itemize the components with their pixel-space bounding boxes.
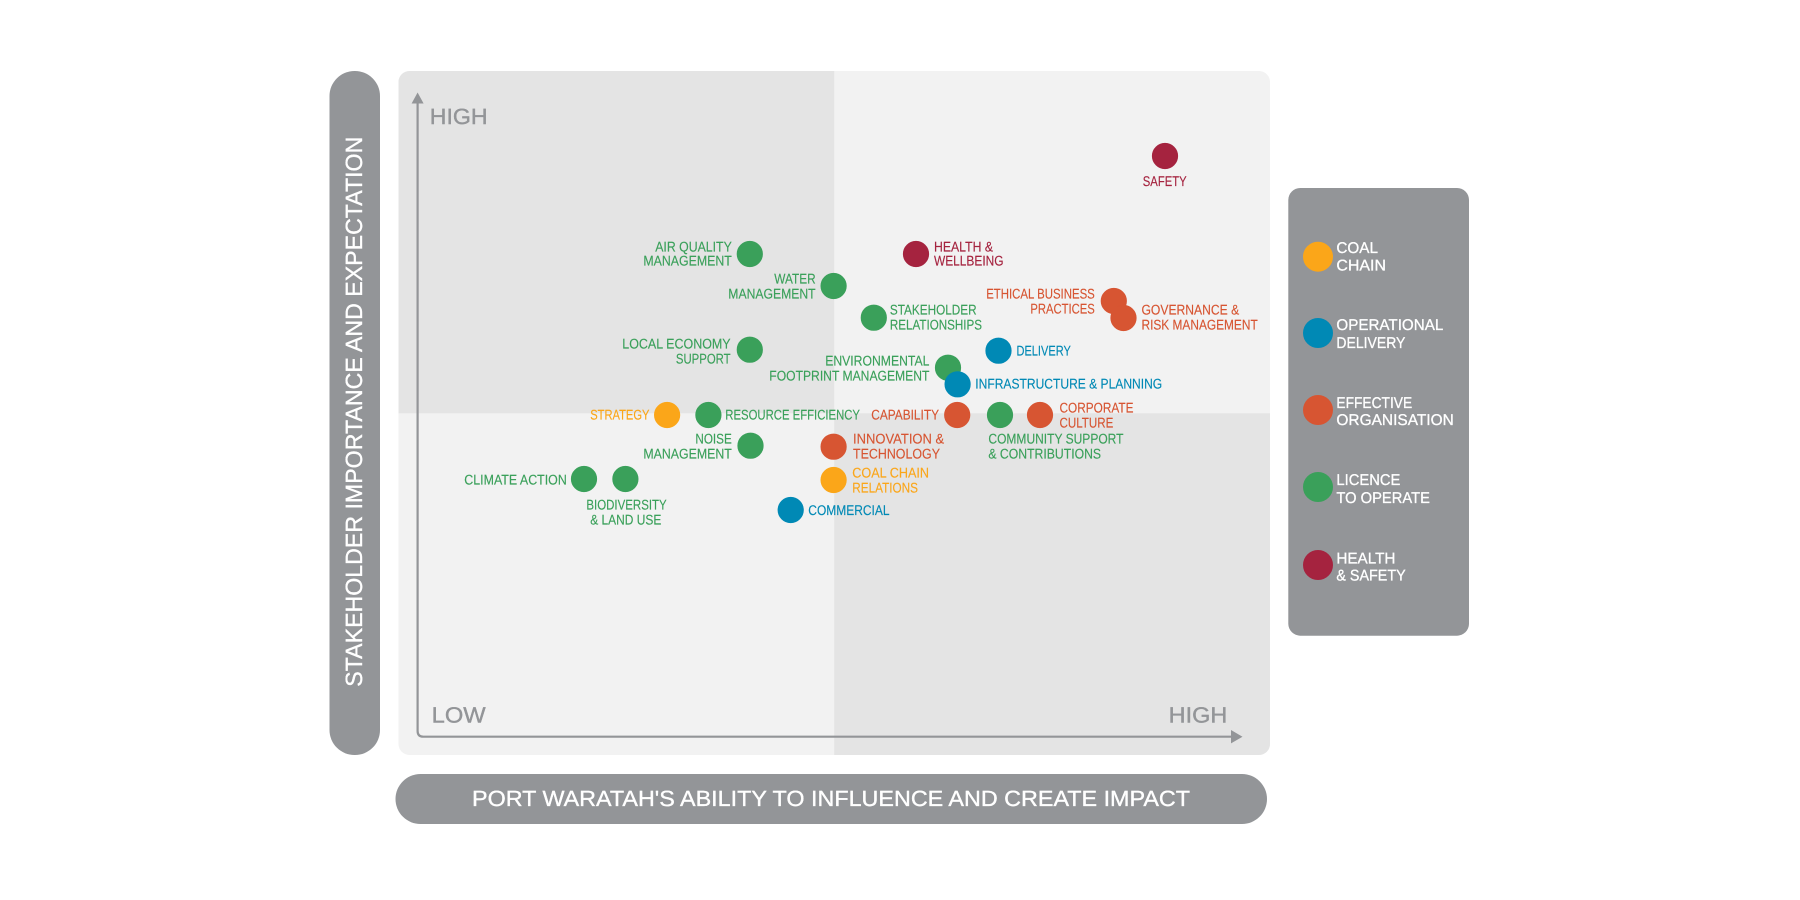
point: biodiversity and land use: BIODIVERSITY <box>586 496 667 512</box>
legend item: health and safety: HEALTH <box>1336 550 1395 567</box>
chart axes with arrows <box>412 92 1243 743</box>
y-axis title pill <box>330 71 380 755</box>
legend item: licence to operate: TO OPERATE <box>1336 490 1430 507</box>
point: water management: WATER <box>774 270 816 286</box>
point: delivery: DELIVERY <box>1016 342 1071 358</box>
point: health and wellbeing: HEALTH & <box>934 238 994 254</box>
legend item: operational delivery: DELIVERY <box>1336 335 1405 352</box>
legend item: operational delivery: OPERATIONAL <box>1336 317 1444 334</box>
point: community support and contributions: COMMUNITY SUPPORT <box>988 430 1124 446</box>
point: coal chain relations: RELATIONS <box>852 479 918 495</box>
point: water management <box>728 270 846 301</box>
point: community support and contributions <box>987 402 1124 461</box>
point: commercial <box>778 497 890 523</box>
point: delivery <box>986 338 1071 363</box>
legend item: effective organisation: ORGANISATION <box>1336 412 1454 429</box>
point: capability: CAPABILITY <box>871 406 940 422</box>
point: coal chain relations: COAL CHAIN <box>852 464 929 480</box>
point: air quality management: MANAGEMENT <box>643 252 732 268</box>
legend panel <box>1288 188 1469 636</box>
legend item: effective organisation: EFFECTIVE <box>1336 395 1412 412</box>
point: commercial: COMMERCIAL <box>808 502 890 518</box>
point: corporate culture: CULTURE <box>1060 414 1113 430</box>
point: governance and risk management: RISK MANAGEMENT <box>1142 316 1258 332</box>
legend item: coal chain: CHAIN <box>1336 257 1386 274</box>
point: safety: SAFETY <box>1143 173 1187 189</box>
point: innovation and technology: TECHNOLOGY <box>853 445 941 461</box>
point: corporate culture: CORPORATE <box>1060 399 1134 415</box>
point: local economy support: SUPPORT <box>676 350 731 366</box>
point: resource efficiency <box>696 402 861 428</box>
legend item: health and safety <box>1304 550 1406 584</box>
point: stakeholder relationships: STAKEHOLDER <box>890 301 977 317</box>
point: water management: MANAGEMENT <box>728 285 816 301</box>
point: governance and risk management <box>1111 301 1258 332</box>
point: biodiversity and land use <box>586 466 667 527</box>
legend item: health and safety: & SAFETY <box>1336 567 1406 584</box>
point: noise management: MANAGEMENT <box>643 445 732 461</box>
point: coal chain relations <box>821 464 929 495</box>
point: noise management <box>643 430 763 461</box>
point: innovation and technology: INNOVATION & <box>853 430 945 446</box>
legend item: effective organisation <box>1304 395 1454 429</box>
point: environmental footprint management: ENVIRONMENTAL <box>825 352 930 368</box>
point: noise management: NOISE <box>695 430 732 446</box>
axis label: high influence: HIGH <box>1169 703 1227 728</box>
axis label: high importance: HIGH <box>430 104 488 129</box>
point: resource efficiency: RESOURCE EFFICIENCY <box>725 406 861 422</box>
x-axis title pill <box>396 774 1267 824</box>
point: infrastructure and planning: INFRASTRUCTURE & PLANNING <box>975 375 1162 391</box>
point: health and wellbeing <box>903 238 1004 268</box>
point: ethical business practices <box>986 285 1126 316</box>
panel: matrix quadrants <box>398 71 1270 755</box>
point: governance and risk management: GOVERNANCE & <box>1142 301 1240 317</box>
legend item: operational delivery <box>1304 317 1444 352</box>
axis label: low: LOW <box>432 703 486 728</box>
point: climate action: CLIMATE ACTION <box>464 471 567 487</box>
legend item: coal chain: COAL <box>1336 240 1378 257</box>
point: environmental footprint management <box>769 352 961 383</box>
point: ethical business practices: PRACTICES <box>1030 300 1095 316</box>
point: health and wellbeing: WELLBEING <box>934 252 1004 268</box>
legend item: licence to operate <box>1304 472 1430 507</box>
point: local economy support: LOCAL ECONOMY <box>622 335 731 351</box>
x-axis title pill: PORT WARATAH'S ABILITY TO INFLUENCE AND CREATE IMPACT <box>472 786 1190 811</box>
point: safety <box>1143 143 1187 189</box>
point: local economy support <box>622 335 762 366</box>
legend item: licence to operate: LICENCE <box>1336 472 1400 489</box>
point: environmental footprint management: FOOTPRINT MANAGEMENT <box>769 367 930 383</box>
point: stakeholder relationships: RELATIONSHIPS <box>890 316 982 332</box>
point: stakeholder relationships <box>861 301 982 332</box>
legend item: coal chain <box>1304 240 1386 274</box>
point: corporate culture <box>1027 399 1134 430</box>
point: biodiversity and land use: & LAND USE <box>590 511 661 527</box>
point: air quality management: AIR QUALITY <box>655 238 732 254</box>
point: climate action <box>464 466 597 492</box>
point: capability <box>871 402 970 428</box>
y-axis title pill: STAKEHOLDER IMPORTANCE AND EXPECTATION <box>341 137 367 687</box>
point: ethical business practices: ETHICAL BUSINESS <box>986 285 1095 301</box>
point: air quality management <box>643 238 762 268</box>
point: strategy <box>590 402 680 428</box>
point: community support and contributions: & CONTRIBUTIONS <box>988 445 1101 461</box>
point: infrastructure and planning <box>945 372 1162 397</box>
point: strategy: STRATEGY <box>590 406 650 422</box>
point: innovation and technology <box>821 430 945 461</box>
